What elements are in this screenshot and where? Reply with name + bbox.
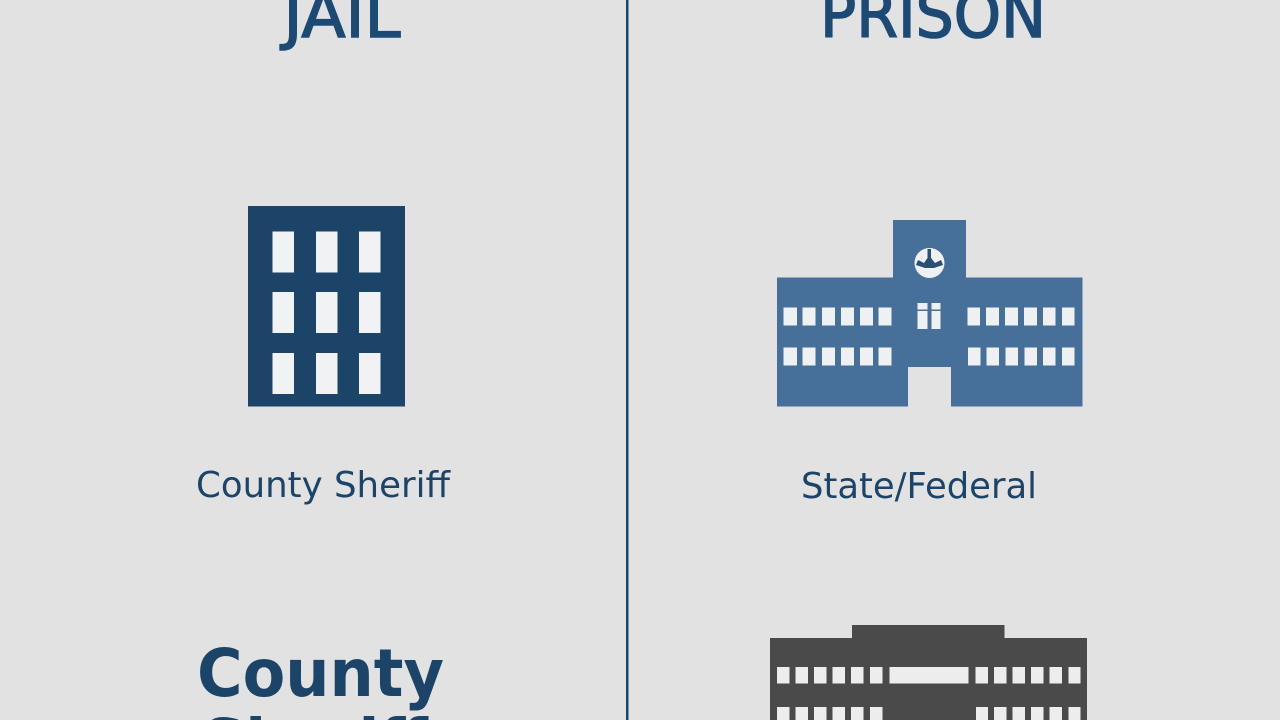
icon: emblem [914, 248, 944, 278]
label: county sheriff: County Sheriff [196, 465, 451, 506]
icon: prison building [777, 220, 1082, 406]
icon: jail building [248, 206, 405, 406]
bold label: county sheriff: County [197, 635, 444, 712]
panel: jail [196, 0, 451, 720]
label: state/federal: State/Federal [801, 466, 1037, 507]
panel: prison [770, 0, 1087, 720]
icon: dark building [770, 625, 1087, 720]
